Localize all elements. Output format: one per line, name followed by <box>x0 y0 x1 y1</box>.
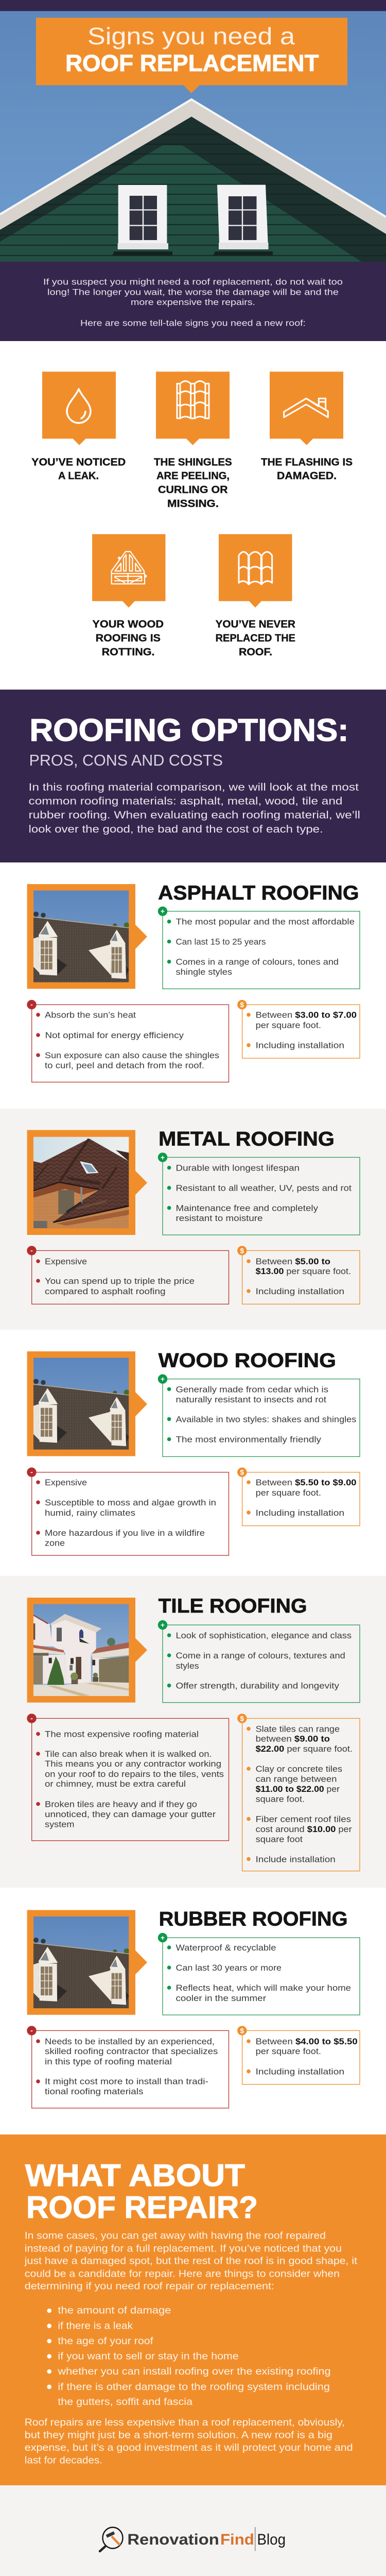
cons box <box>27 1467 229 1555</box>
title line 1: Signs you need a <box>87 23 295 49</box>
cons box: in this type of roofing material <box>45 2057 172 2066</box>
cons box: Tile can also break when it is walked on. <box>45 1749 212 1759</box>
intro text <box>43 277 343 328</box>
pros box: styles <box>176 1661 199 1671</box>
cost box: can range between <box>256 1774 337 1784</box>
right window <box>217 185 269 249</box>
icon: roof tiles <box>239 552 272 584</box>
label: ROTTING. <box>102 647 154 658</box>
sign 2: shingles <box>154 371 232 510</box>
cons box: It might cost more to install than tradi- <box>45 2077 208 2087</box>
intro panel <box>0 262 386 341</box>
photo frame <box>27 884 147 989</box>
heading: ROOF REPAIR? <box>26 2190 258 2225</box>
cost box: per square foot. <box>256 1021 321 1030</box>
card: tile roofing <box>0 1576 386 1888</box>
cost box: $ <box>240 1468 244 1477</box>
cons box: The most expensive roofing material <box>45 1729 199 1739</box>
cost box: Between $3.00 to $7.00 <box>256 1010 357 1020</box>
label: THE SHINGLES <box>154 456 232 468</box>
pros box: The most popular and the most affordable <box>176 917 355 927</box>
cons box: - <box>30 2026 33 2035</box>
pros box: Reflects heat, which will make your home <box>176 1983 351 1993</box>
pros box <box>158 1620 360 1703</box>
label: A LEAK. <box>58 470 99 482</box>
label: REPLACED THE <box>216 633 295 644</box>
label: CURLING OR <box>158 484 228 496</box>
cons box: - <box>30 1246 33 1255</box>
pros box: Waterproof & recyclable <box>176 1943 276 1953</box>
label: THE FLASHING IS <box>261 456 353 468</box>
title: WOOD ROOFING <box>159 1350 336 1371</box>
cost box: $ <box>240 1246 244 1255</box>
cost box <box>237 1714 360 1871</box>
cost box <box>237 1000 360 1058</box>
paragraph: In some cases, you can get away with having the roof repaired <box>25 2230 326 2242</box>
title banner <box>36 18 347 93</box>
intro paragraph: common roofing materials: asphalt, metal, wood, tile and <box>29 795 343 807</box>
cons box: - <box>30 1468 33 1476</box>
paragraph <box>24 2230 358 2292</box>
considerations list: if there is a leak <box>58 2320 133 2331</box>
considerations list: if there is other damage to the roofing system including <box>58 2381 330 2393</box>
cost box: Clay or concrete tiles <box>256 1764 342 1774</box>
label: YOU’VE NEVER <box>216 619 296 630</box>
cons box: Expensive <box>45 1257 87 1266</box>
pros box: + <box>161 1375 165 1383</box>
cost box: square foot. <box>256 1794 305 1804</box>
photo: metal tile roof <box>33 1137 129 1228</box>
cons box: Susceptible to moss and algae growth in <box>45 1498 216 1507</box>
subheading: PROS, CONS AND COSTS <box>29 751 223 769</box>
sign 1: leak <box>31 371 126 482</box>
pros box: shingle styles <box>176 967 232 977</box>
cost box: $ <box>240 2026 244 2035</box>
label: ARE PEELING, <box>156 470 230 482</box>
cost box: Between $5.50 to $9.00 <box>256 1478 356 1487</box>
label: ROOFING IS <box>96 633 161 644</box>
card: metal roofing <box>0 1109 386 1330</box>
cons box: to curl, peel and detach from the roof. <box>45 1060 204 1070</box>
cost box: per square foot. <box>256 1488 321 1498</box>
cons box: Needs to be installed by an experienced, <box>45 2037 215 2046</box>
heading <box>25 2158 258 2225</box>
cons box: Absorb the sun’s heat <box>45 1010 136 1020</box>
hero photo: house gable against sky <box>0 11 386 262</box>
considerations list: the gutters, soffit and fascia <box>58 2396 192 2408</box>
intro paragraph: rubber roofing. When evaluating each roofing material, we’ll <box>29 809 360 821</box>
cost box: Including installation <box>256 1041 344 1050</box>
cons box: More hazardous if you live in a wildfire <box>45 1528 205 1538</box>
cons box: Expensive <box>45 1478 87 1487</box>
cost box: Fiber cement roof tiles <box>256 1815 351 1824</box>
title line 2: ROOF REPLACEMENT <box>65 50 319 76</box>
title: TILE ROOFING <box>159 1595 307 1617</box>
intro text: more expensive the repairs. <box>131 297 255 307</box>
pros box: + <box>161 907 165 916</box>
sign 5: never replaced <box>216 534 296 658</box>
pros box: The most environmentally friendly <box>176 1434 322 1445</box>
icon: roof with chimney <box>284 398 328 417</box>
considerations list <box>47 2305 331 2408</box>
pros box: resistant to moisture <box>176 1213 262 1223</box>
icon: peeling shingles <box>177 381 209 418</box>
cons box: - <box>30 1001 33 1009</box>
cons box: tional roofing materials <box>45 2087 143 2096</box>
cons box: on your roof to do repairs to the tiles, vents <box>45 1769 224 1779</box>
cons box <box>27 1000 229 1082</box>
pros box: + <box>161 1934 165 1942</box>
pros box: Come in a range of colours, textures and <box>176 1651 345 1660</box>
label: MISSING. <box>167 498 219 510</box>
cons box <box>27 2026 229 2108</box>
pros box: Resistant to all weather, UV, pests and rot <box>176 1183 352 1193</box>
intro text: long! The longer you wait, the worse the damage will be and the <box>47 287 339 297</box>
pros box: Can last 30 years or more <box>176 1963 282 1973</box>
cost box: per square foot. <box>256 2046 321 2056</box>
photo: asphalt roof with dormers <box>33 890 129 982</box>
cost box: square foot <box>256 1835 303 1844</box>
closing paragraph <box>25 2417 353 2466</box>
photo frame <box>27 1130 147 1235</box>
pros box: cooler in the summer <box>176 1993 266 2003</box>
footer panel <box>0 2485 386 2576</box>
label: ROOF. <box>239 647 272 658</box>
cons box: Not optimal for energy efficiency <box>45 1030 184 1040</box>
pros box: Maintenance free and completely <box>176 1203 319 1213</box>
pros box: Generally made from cedar which is <box>176 1384 328 1394</box>
title: ASPHALT ROOFING <box>158 882 359 904</box>
pros box <box>158 907 360 989</box>
cons box: Broken tiles are heavy and if they go <box>45 1799 197 1809</box>
cost box: $13.00 per square foot. <box>256 1266 351 1276</box>
photo frame <box>27 1598 147 1703</box>
pros box <box>158 1374 360 1456</box>
section background <box>0 1576 386 1888</box>
cons box: - <box>30 1714 33 1722</box>
cost box: Slate tiles can range <box>256 1724 340 1734</box>
cost box: Including installation <box>256 1508 344 1518</box>
title: RUBBER ROOFING <box>159 1908 348 1930</box>
section background <box>0 1109 386 1330</box>
cons box: system <box>45 1820 74 1829</box>
label <box>31 456 126 482</box>
cons box: zone <box>45 1538 65 1548</box>
title: METAL ROOFING <box>159 1128 335 1150</box>
paragraph: instead of paying for a full replacement. If you’ve noticed that you <box>25 2243 342 2254</box>
cost box: between $9.00 to <box>256 1734 330 1743</box>
cons box: This means you or any contractor working <box>45 1759 221 1769</box>
heading: WHAT ABOUT <box>25 2158 245 2193</box>
cons box: or chimney, must be extra careful <box>45 1779 186 1789</box>
cost box: cost around $10.00 per <box>256 1824 352 1834</box>
intro text: Here are some tell-tale signs you need a new roof: <box>80 318 306 328</box>
cons box: You can spend up to triple the price <box>45 1276 195 1286</box>
label: DAMAGED. <box>277 470 337 482</box>
card: wood roofing <box>27 1350 360 1555</box>
header band <box>0 0 386 11</box>
photo frame <box>27 1910 147 2015</box>
cost box: Between $5.00 to <box>256 1257 330 1266</box>
closing paragraph: expense, but it’s a good investment as it will protect your home and <box>25 2442 353 2453</box>
cost box: $11.00 to $22.00 per <box>256 1784 340 1794</box>
cons box: skilled roofing contractor that specializes <box>45 2046 218 2056</box>
card: asphalt roofing <box>27 882 360 1082</box>
photo: white house with tile roof <box>33 1604 129 1696</box>
sign 4: wood rotting <box>92 534 166 658</box>
left window <box>118 185 168 249</box>
cost box <box>237 2026 360 2084</box>
cons box <box>27 1714 229 1841</box>
intro paragraph: look over the good, the bad and the cost of each type. <box>29 823 323 835</box>
pros box: Available in two styles: shakes and shingles <box>176 1414 356 1424</box>
cost box <box>237 1246 360 1304</box>
card: rubber roofing <box>27 1908 360 2108</box>
photo: roof with dormers <box>33 1358 129 1450</box>
considerations list: if you want to sell or stay in the home <box>58 2350 239 2362</box>
cost box: Include installation <box>256 1854 336 1864</box>
photo frame <box>27 1351 147 1456</box>
logo: RenovationFind Blog: Blog <box>257 2531 286 2548</box>
cost box: $ <box>240 1001 244 1009</box>
pros box: Can last 15 to 25 years <box>176 937 266 947</box>
closing paragraph: last for decades. <box>25 2455 102 2466</box>
intro paragraph: In this roofing material comparison, we will look at the most <box>29 782 359 793</box>
icon: magnifier with hammer <box>100 2528 122 2551</box>
sign 3: flashing <box>261 371 353 482</box>
considerations list: the age of your roof <box>58 2335 153 2347</box>
pros box <box>158 1933 360 2015</box>
closing paragraph: but they might just be a short-term solution. A new roof is a big <box>25 2430 332 2441</box>
cost box: Including installation <box>256 1286 344 1296</box>
cons box: compared to asphalt roofing <box>45 1286 166 1296</box>
label <box>261 456 353 482</box>
paragraph: could be a candidate for repair. Here are things to consider when <box>25 2268 340 2279</box>
pros box: Offer strength, durability and longevity <box>176 1681 340 1691</box>
icon: roof truss <box>112 552 147 584</box>
pros box: naturally resistant to insects and rot <box>176 1395 326 1404</box>
closing paragraph: Roof repairs are less expensive than a roof replacement, obviously, <box>25 2417 345 2428</box>
label: YOUR WOOD <box>92 619 164 630</box>
paragraph: determining if you need roof repair or replacement: <box>25 2281 274 2292</box>
pros box <box>158 1153 360 1235</box>
photo: roof with dormers <box>33 1917 129 2008</box>
label <box>216 619 296 658</box>
pros box: Durable with longest lifespan <box>176 1163 300 1173</box>
cons box <box>27 1246 229 1304</box>
panel: roofing options intro <box>0 689 386 862</box>
paragraph: just have a damaged spot, but the rest of the roof is in good shape, it <box>24 2256 358 2267</box>
pros box: + <box>161 1621 165 1629</box>
cons box: unnoticed, they can damage your gutter <box>45 1809 216 1819</box>
cost box <box>237 1467 360 1526</box>
pros box: Look of sophistication, elegance and class <box>176 1631 352 1640</box>
cost box: Including installation <box>256 2066 344 2076</box>
pros box: + <box>161 1153 165 1161</box>
cost box: $ <box>240 1714 244 1722</box>
cost box: $22.00 per square foot. <box>256 1744 353 1754</box>
logo: RenovationFind Blog: Find <box>220 2531 254 2548</box>
logo: RenovationFind Blog <box>100 2527 286 2551</box>
considerations list: whether you can install roofing over the existing roofing <box>57 2366 331 2377</box>
label <box>92 619 164 658</box>
wordmark: Renovation <box>127 2531 219 2548</box>
intro text: If you suspect you might need a roof replacement, do not wait too <box>43 277 343 287</box>
pros box: Comes in a range of colours, tones and <box>176 957 339 967</box>
cons box: humid, rainy climates <box>45 1508 135 1518</box>
heading: ROOFING OPTIONS: <box>29 713 348 748</box>
intro paragraph <box>29 782 360 835</box>
considerations list: the amount of damage <box>58 2305 171 2316</box>
label: YOU’VE NOTICED <box>31 456 126 468</box>
panel: what about roof repair <box>0 2134 386 2485</box>
cons box: Sun exposure can also cause the shingles <box>45 1050 219 1060</box>
cost box: Between $4.00 to $5.50 <box>256 2037 358 2046</box>
label <box>154 456 232 510</box>
icon: water drop <box>67 389 91 423</box>
